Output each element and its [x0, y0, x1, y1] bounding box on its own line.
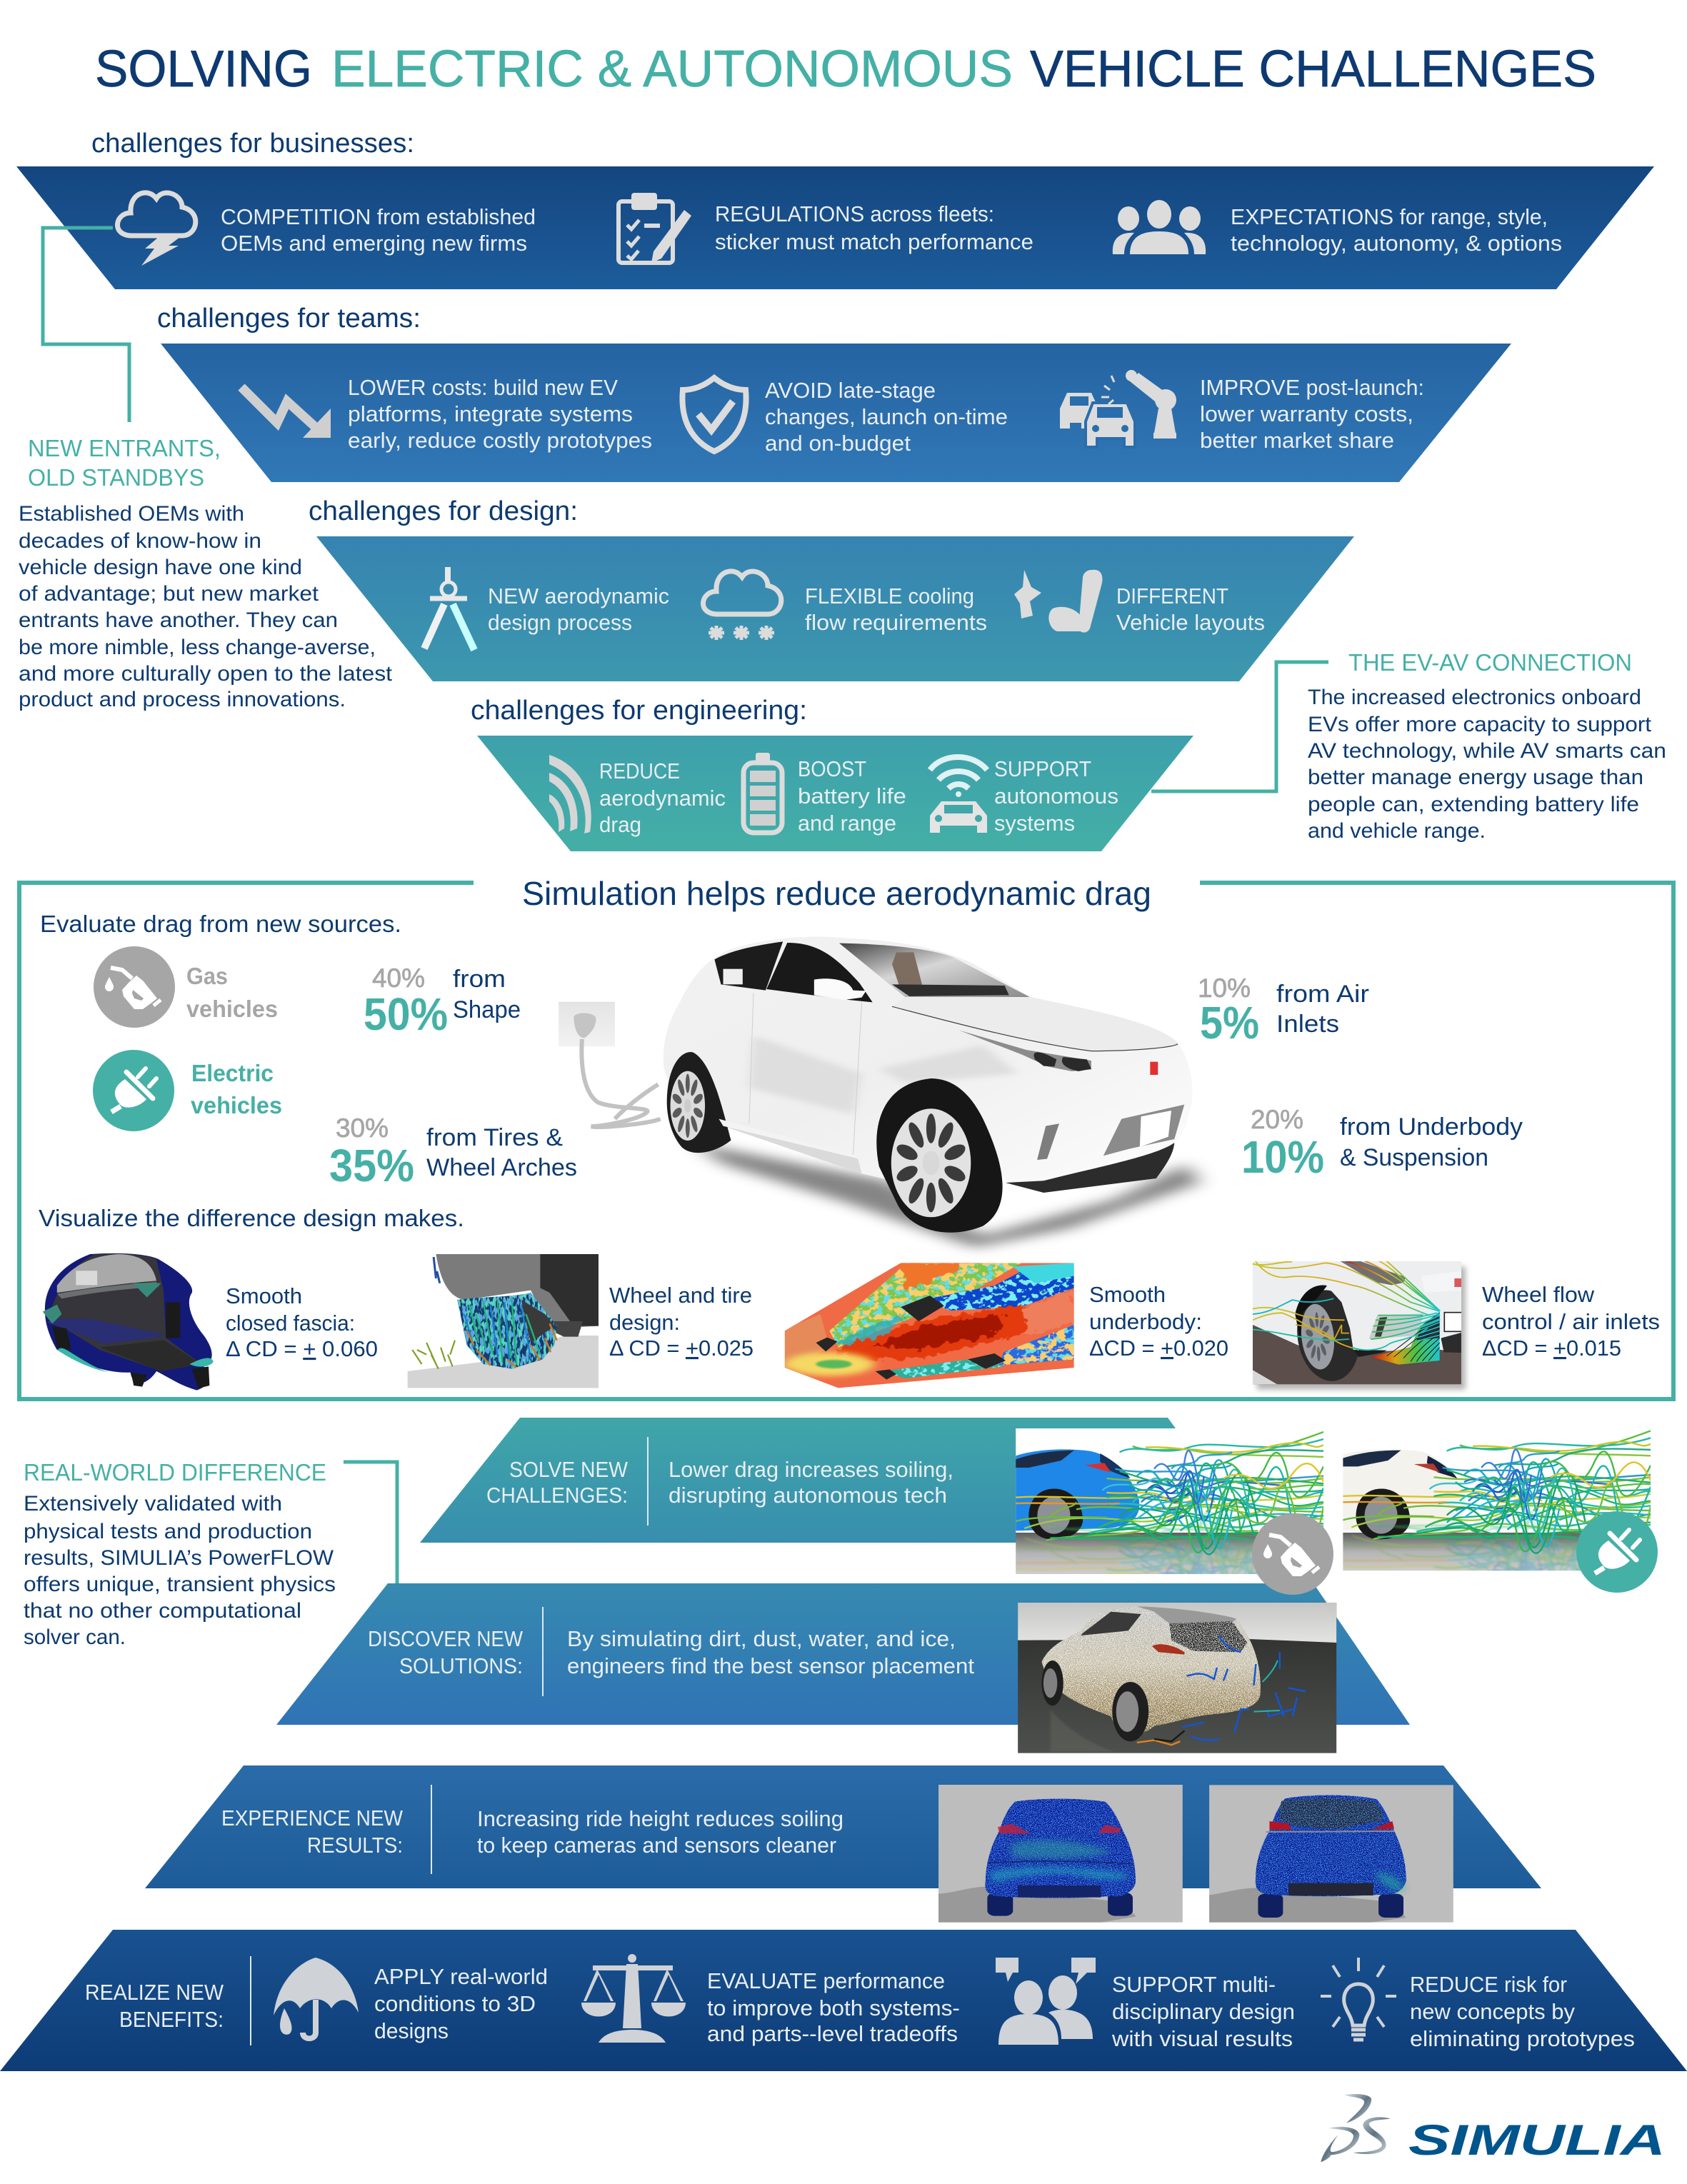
heading: challenges for teams: challenges for teams:: [157, 304, 421, 334]
text: boost battery: battery life: [798, 783, 906, 808]
text: avoid: and on-budget: [765, 431, 911, 456]
callout text: EV-AV connection: and vehicle range.: [1308, 819, 1486, 843]
text: apply: [374, 1964, 548, 2043]
text: lower costs: LOWER costs: build new EV: [348, 375, 618, 400]
label: discover new solutions: SOLUTIONS:: [399, 1653, 523, 1678]
callout text: EV-AV connection: better manage energy usage than: [1308, 766, 1643, 789]
text: lower costs: [348, 375, 652, 453]
caption: closed fascia: Smooth: [226, 1283, 302, 1308]
text: simulating dirt: engineers find the best sensor placement: [567, 1653, 974, 1678]
text: flexible cooling: flow requirements: [805, 610, 987, 635]
text: evaluate: and parts--level tradeoffs: [707, 2021, 958, 2046]
icon: light bulb: [1321, 1958, 1396, 2040]
underside: [1006, 1143, 1174, 1193]
callout text: real-world difference: results, SIMULIA’s PowerFLOW: [24, 1546, 334, 1570]
label: gas vehicles: [186, 963, 278, 1022]
label: experience new results: [221, 1805, 404, 1858]
icon: vehicle seat: [1014, 570, 1102, 633]
callout text: new entrants: of advantage; but new market: [19, 582, 319, 606]
stat: tires and wheel arches share: 35%: [329, 1140, 414, 1191]
logo mark: 3DS: [1321, 2094, 1391, 2162]
text: ride height: [477, 1806, 844, 1858]
label: electric vehicles: [191, 1060, 282, 1118]
image: soiling at standard ride height: [938, 1785, 1183, 1923]
car: [1041, 1606, 1261, 1735]
callout text: real-world difference: offers unique, transient physics: [24, 1573, 336, 1596]
text: evaluate: to improve both systems-: [707, 1995, 960, 2020]
text: regulations: REGULATIONS across fleets:: [715, 201, 994, 226]
text: support autonomous: systems: [994, 811, 1075, 836]
label: discover new solutions: DISCOVER NEW: [368, 1626, 524, 1651]
icon: umbrella: [274, 1958, 359, 2041]
text: apply: designs: [374, 2018, 449, 2043]
stat: shape share: 40%: [372, 963, 425, 993]
callout text: new entrants: product and process innovations.: [19, 688, 346, 711]
icon: compass: [424, 567, 474, 650]
text: lower drag: Lower drag increases soiling,: [669, 1457, 953, 1482]
subheading: evaluate drag: Evaluate drag from new sources.: [40, 911, 401, 937]
label: solve new challenges: CHALLENGES:: [486, 1483, 628, 1508]
heading: simulation helps: Simulation helps reduce aerodynamic drag: [522, 875, 1151, 912]
text: regulations: sticker must match performance: [715, 229, 1033, 254]
caption: underbody: ΔCD = +0.020: [1089, 1336, 1228, 1361]
callout text: EV-AV connection: The increased electronics onboard: [1308, 686, 1641, 709]
callout text: new entrants: entrants have another. They can: [19, 608, 338, 632]
heading: challenges for engineering: challenges for engineering:: [471, 696, 807, 726]
caption: wheel and tire: [609, 1283, 754, 1361]
callout text: new entrants: decades of know-how in: [19, 529, 261, 553]
caption: wheel and tire: Δ CD = +0.025: [609, 1336, 754, 1361]
image: flow around blue gas car: [1016, 1428, 1323, 1574]
callout text: new entrants: Established OEMs with: [19, 502, 244, 526]
text: different: Vehicle layouts: [1116, 610, 1265, 635]
label: gas vehicles: vehicles: [186, 996, 278, 1022]
text: different: [1116, 583, 1265, 635]
image: flow around white electric car: [1343, 1430, 1651, 1571]
label: solve new challenges: [486, 1457, 629, 1508]
text: avoid: changes, launch on-time: [765, 404, 1008, 429]
stat: tires and wheel arches share: from Tires &: [426, 1124, 563, 1151]
icon: cloud with snow: [703, 571, 781, 640]
callout text: EV-AV connection: EVs offer more capacity to support: [1308, 713, 1652, 736]
callout text: new entrants: [19, 502, 393, 711]
label: experience new results: RESULTS:: [307, 1833, 403, 1858]
text: improve: better market share: [1200, 428, 1394, 453]
icon: wifi and car: [930, 757, 987, 833]
label: electric vehicles: vehicles: [191, 1092, 282, 1118]
text: reduce drag: aerodynamic: [599, 786, 726, 811]
icon: people group: [1113, 200, 1206, 254]
label: realize new benefits: REALIZE NEW: [85, 1980, 224, 2005]
callout text: real-world difference: that no other computational: [24, 1599, 301, 1623]
panel: challenges for teams: [161, 344, 1511, 482]
text: new aerodynamic: [488, 583, 669, 635]
text: support multi-disciplinary: [1111, 1972, 1295, 2051]
windshield: [839, 943, 1030, 997]
text: competition: [221, 204, 536, 256]
panel: experience new results: [145, 1765, 1541, 1888]
caption: wheel and tire: design:: [609, 1310, 680, 1335]
text: ride height: Increasing ride height reduces soiling: [477, 1806, 844, 1831]
text: support multi-disciplinary: disciplinary design: [1112, 1999, 1295, 2024]
caption: closed fascia: [226, 1283, 378, 1361]
stat: tires and wheel arches share: [329, 1113, 577, 1191]
body shading: [749, 1036, 1018, 1114]
label: realize new benefits: [85, 1980, 224, 2032]
icon: shield with check: [682, 378, 746, 451]
callout text: EV-AV connection: people can, extending battery life: [1308, 793, 1639, 816]
text: expectations: [1231, 204, 1562, 256]
icon: electric circle: [1576, 1511, 1658, 1593]
image: soiling at raised ride height: [1209, 1785, 1453, 1923]
panel: discover new solutions: [276, 1583, 1410, 1725]
panel frame: simulation: [19, 883, 1673, 1399]
headlight: [959, 1031, 1091, 1071]
text: avoid: [765, 378, 1008, 456]
image: wheel flow streamlines: [1253, 1261, 1466, 1390]
stat: underbody share: 10%: [1241, 1131, 1324, 1183]
icon: declining arrow: [241, 387, 331, 438]
text: new aerodynamic: design process: [488, 610, 632, 635]
text: simulating dirt: By simulating dirt, dust, water, and ice,: [567, 1626, 956, 1651]
callout heading: new entrants: OLD STANDBYS: [28, 464, 204, 491]
stat: underbody share: & Suspension: [1340, 1144, 1488, 1171]
callout heading: new entrants: NEW ENTRANTS,: [28, 435, 221, 461]
text: reduce drag: drag: [599, 812, 641, 837]
icon: cars and robot arm: [1060, 370, 1176, 447]
connector: EV-AV: [1151, 662, 1328, 791]
callout text: real-world difference: [24, 1492, 336, 1649]
text: reduce risk: new concepts by: [1410, 1999, 1575, 2024]
title: [95, 41, 1596, 98]
heading: challenges for businesses: challenges for businesses:: [91, 129, 414, 159]
text: evaluate: EVALUATE performance: [707, 1968, 945, 1993]
stat: shape share: [364, 963, 521, 1040]
text: flexible cooling: [805, 583, 987, 635]
icon: clipboard checklist: [619, 193, 691, 263]
text: reduce drag: REDUCE: [599, 758, 680, 783]
text: lower drag: disrupting autonomous tech: [669, 1483, 947, 1508]
text: support multi-disciplinary: with visual results: [1111, 2026, 1293, 2051]
callout heading: EV-AV connection: THE EV-AV CONNECTION: [1348, 649, 1632, 676]
text: new aerodynamic: NEW aerodynamic: [488, 583, 669, 608]
label: gas vehicles: Gas: [186, 963, 228, 989]
text: boost battery: [798, 756, 906, 836]
caption: underbody: [1089, 1282, 1228, 1361]
callout text: real-world difference: Extensively validated with: [24, 1492, 282, 1516]
text: lower drag: [669, 1457, 953, 1508]
title: ELECTRIC & AUTONOMOUS: [331, 41, 1013, 98]
text: expectations: technology, autonomy, & options: [1231, 231, 1562, 256]
icon: people discussing: [996, 1958, 1096, 2045]
stat: air inlets share: 5%: [1200, 997, 1259, 1048]
callout text: EV-AV connection: AV technology, while AV smarts can: [1308, 739, 1666, 763]
icon: gas circle: [1252, 1513, 1333, 1595]
text: lower costs: early, reduce costly prototypes: [348, 428, 652, 453]
text: improve: lower warranty costs,: [1200, 401, 1413, 426]
icon: aerodynamic curves: [549, 755, 591, 833]
label: realize new benefits: BENEFITS:: [119, 2007, 224, 2032]
callout heading: real-world difference: REAL-WORLD DIFFERENCE: [24, 1459, 326, 1486]
stat: air inlets share: 10%: [1198, 973, 1251, 1003]
front wheel: [876, 1078, 1003, 1233]
caption: underbody: Smooth: [1089, 1282, 1166, 1307]
title: SOLVING: [95, 41, 312, 98]
caption: wheel flow: control / air inlets: [1482, 1309, 1660, 1334]
text: flexible cooling: FLEXIBLE cooling: [805, 583, 974, 608]
callout text: real-world difference: physical tests and production: [24, 1520, 312, 1543]
text: boost battery: and range: [798, 811, 896, 836]
label: discover new solutions: [368, 1626, 524, 1678]
stat: air inlets share: Inlets: [1276, 1011, 1339, 1038]
heading: challenges for design: challenges for design:: [309, 496, 578, 526]
text: improve: IMPROVE post-launch:: [1200, 375, 1424, 400]
panel: solve new challenges: [420, 1418, 1176, 1543]
callout heading: new entrants: [28, 435, 221, 491]
icon: electric plug circle: [93, 1050, 174, 1131]
mirror: [814, 978, 866, 1000]
image: underbody pressure map: [771, 1255, 1084, 1398]
text: reduce risk: eliminating prototypes: [1410, 2026, 1635, 2051]
text: support autonomous: autonomous: [994, 783, 1118, 808]
text: boost battery: BOOST: [798, 756, 866, 781]
callout text: new entrants: vehicle design have one kind: [19, 556, 302, 579]
text: competition: COMPETITION from established: [221, 204, 536, 229]
label: electric vehicles: Electric: [191, 1060, 274, 1086]
stat: shape share: from: [453, 966, 506, 993]
text: ride height: to keep cameras and sensors cleaner: [477, 1833, 836, 1858]
hood highlight: [892, 997, 1178, 1051]
stat: shape share: 50%: [364, 988, 448, 1040]
text: apply: APPLY real-world: [374, 1964, 548, 1989]
callout text: new entrants: and more culturally open to the latest: [19, 662, 393, 686]
caption: underbody: underbody:: [1089, 1309, 1202, 1334]
text: lower costs: platforms, integrate systems: [348, 401, 633, 426]
image: soiled car simulation: [1018, 1603, 1336, 1753]
caption: closed fascia: Δ CD = + 0.060: [226, 1336, 378, 1361]
illustration: white electric car with charger: [559, 936, 1199, 1248]
callout text: new entrants: be more nimble, less change-averse,: [19, 636, 376, 659]
stat: underbody share: 20%: [1251, 1105, 1303, 1134]
connector: real-world difference: [344, 1462, 397, 1586]
label: solve new challenges: SOLVE NEW: [509, 1457, 629, 1482]
logo wordmark: SIMULIA: [1408, 2116, 1666, 2164]
icon: battery: [744, 753, 782, 833]
text: competition: OEMs and emerging new firms: [221, 231, 527, 256]
rear wheel: [667, 1052, 731, 1153]
text: regulations: [715, 201, 1033, 254]
connector: new entrants: [43, 228, 129, 422]
stat: underbody share: [1241, 1105, 1523, 1183]
icon: storm cloud: [117, 193, 196, 266]
panel: challenges for engineering: [477, 736, 1193, 851]
image: wheel and tire wake: [408, 1254, 599, 1388]
front badge: [1150, 1062, 1158, 1075]
shadow: [693, 1143, 1199, 1248]
subheading: visualize: Visualize the difference design makes.: [39, 1205, 464, 1231]
stat: underbody share: from Underbody: [1340, 1113, 1523, 1141]
stat: tires and wheel arches share: Wheel Arches: [426, 1154, 577, 1181]
text: improve: [1200, 375, 1424, 453]
stat: tires and wheel arches share: 30%: [336, 1113, 389, 1143]
caption: wheel flow: [1482, 1282, 1660, 1361]
tires: [816, 1296, 1006, 1380]
icon: balance scales: [581, 1954, 686, 2043]
car body: [664, 936, 1193, 1183]
panel: realize new benefits: [0, 1930, 1687, 2071]
text: apply: conditions to 3D: [374, 1991, 536, 2016]
text: reduce risk: REDUCE risk for: [1410, 1972, 1567, 1997]
wall socket and cable: [559, 1002, 661, 1127]
caption: closed fascia: closed fascia:: [226, 1311, 355, 1336]
logo: SIMULIA: [1321, 2094, 1666, 2164]
panel: challenges for design: [316, 536, 1354, 681]
text: support autonomous: [994, 756, 1118, 836]
front grille and plate: [1103, 1105, 1184, 1156]
image: closed fascia simulation: [43, 1253, 214, 1391]
panel: challenges for businesses: [16, 166, 1654, 289]
caption: wheel flow: ΔCD = +0.015: [1482, 1336, 1621, 1361]
windows: [714, 941, 783, 991]
text: reduce risk: [1410, 1972, 1635, 2051]
title: VEHICLE CHALLENGES: [1030, 41, 1596, 98]
text: avoid: AVOID late-stage: [765, 378, 936, 403]
stat: shape share: Shape: [453, 996, 521, 1023]
stat: air inlets share: from Air: [1276, 981, 1369, 1008]
callout text: real-world difference: solver can.: [24, 1626, 126, 1649]
text: different: DIFFERENT: [1116, 583, 1228, 608]
text: expectations: EXPECTATIONS for range, style,: [1231, 204, 1548, 229]
text: support autonomous: SUPPORT: [994, 756, 1091, 781]
label: experience new results: EXPERIENCE NEW: [221, 1805, 404, 1830]
caption: wheel flow: Wheel flow: [1482, 1282, 1595, 1307]
icon: gas pump circle: [94, 946, 175, 1028]
text: reduce drag: [599, 758, 726, 837]
text: evaluate: [707, 1968, 960, 2046]
text: simulating dirt: [567, 1626, 974, 1678]
text: support multi-disciplinary: SUPPORT multi-: [1112, 1972, 1276, 1997]
stat: air inlets share: [1198, 973, 1369, 1048]
caption: wheel and tire: Wheel and tire: [609, 1283, 752, 1308]
callout text: EV-AV connection: [1308, 686, 1666, 843]
